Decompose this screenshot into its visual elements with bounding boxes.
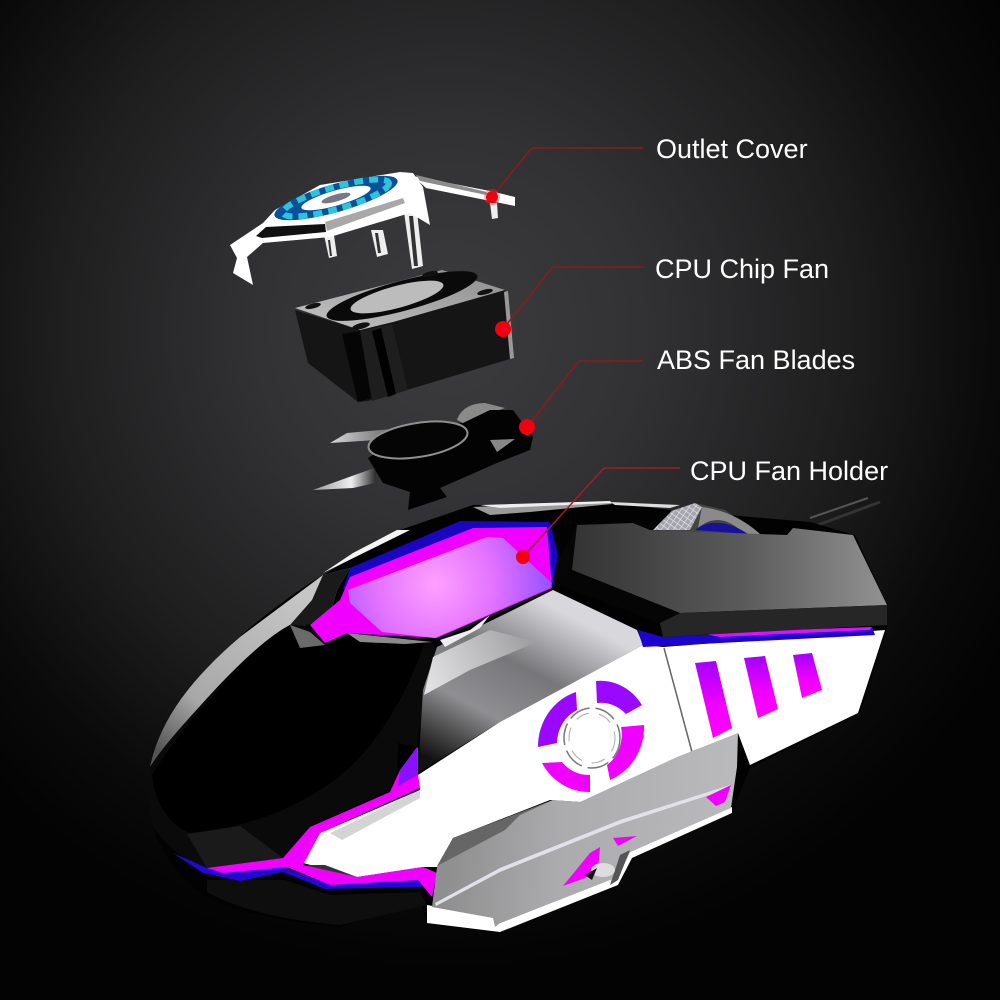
base lower sheen (207, 880, 427, 925)
callout: CPU chip fan (495, 254, 829, 337)
fan grille (271, 167, 401, 229)
shell highlight (150, 568, 350, 767)
blue and magenta light bands (173, 747, 437, 897)
side slots (695, 653, 822, 738)
callout: outlet cover (484, 134, 808, 205)
callout: CPU fan holder: CPU Fan Holder (690, 456, 888, 486)
top strips (473, 501, 612, 515)
callout: CPU chip fan: CPU Chip Fan (655, 254, 829, 284)
grey centre panel (418, 590, 643, 773)
black side of right button (553, 525, 680, 637)
main left button (149, 625, 437, 870)
scroll wheel (653, 503, 760, 535)
mouse base silhouette (150, 502, 887, 932)
cable (810, 498, 880, 526)
CPU chip fan part (295, 261, 514, 402)
callout: CPU fan holder (516, 456, 888, 564)
grey lower panel (432, 733, 738, 927)
glowing window panel (348, 537, 552, 638)
white lower rim (427, 807, 732, 932)
mouse (149, 498, 887, 932)
ABS fan blades part (313, 403, 533, 510)
white main body (303, 630, 885, 877)
outlet cover part (230, 167, 515, 285)
white arc on left (323, 530, 410, 573)
callout: outlet cover: Outlet Cover (656, 134, 808, 164)
lit ring (538, 681, 644, 792)
blue trim of window (343, 521, 558, 590)
callout: ABS fan blades: ABS Fan Blades (657, 345, 855, 375)
side divider (664, 648, 692, 752)
callout: ABS fan blades (519, 345, 855, 435)
right button (553, 523, 887, 647)
magenta window surround (310, 527, 552, 643)
